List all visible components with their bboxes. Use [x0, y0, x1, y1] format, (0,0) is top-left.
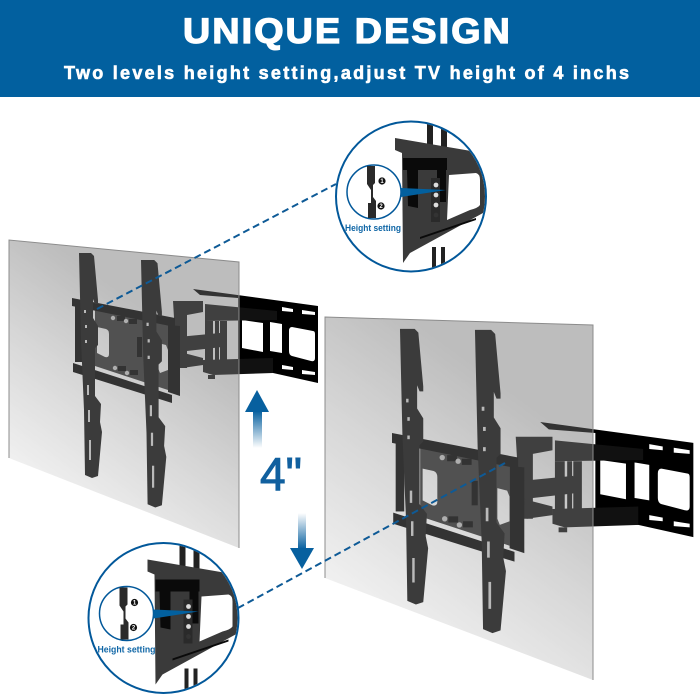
inset circle — [100, 586, 154, 640]
marker 1: 1 — [380, 179, 384, 185]
header banner — [0, 0, 700, 97]
detail: plate close-up — [148, 546, 238, 689]
dashed leader line: bottom callout — [238, 463, 505, 608]
subtitle: Two levels height setting,adjust TV height of 4 inchs — [64, 63, 629, 83]
callout: bottom detail — [88, 542, 252, 698]
detail: plate close-up — [395, 124, 485, 268]
right wall with bracket: lower position — [325, 317, 693, 680]
plate body — [95, 310, 168, 390]
left rail — [400, 329, 428, 605]
wall plate — [540, 422, 693, 537]
dashed leader line: top callout — [97, 184, 336, 309]
wall plate — [193, 289, 318, 383]
left rail — [79, 253, 102, 478]
pointer wedge — [401, 188, 446, 197]
arrow down — [290, 513, 314, 569]
callout: top detail — [336, 121, 500, 277]
swing arm and mounting plate: upper position — [72, 289, 318, 403]
label: height setting: Height setting — [345, 223, 401, 233]
marker 1: 1 — [133, 601, 137, 607]
plate body — [420, 448, 510, 546]
title: UNIQUE DESIGN — [183, 11, 512, 51]
left wall with bracket: upper position — [9, 240, 318, 548]
inset circle — [347, 165, 401, 219]
arms — [516, 437, 643, 532]
arms — [173, 301, 277, 379]
arrow up — [245, 390, 269, 448]
right rail — [475, 330, 506, 633]
marker 2: 2 — [379, 204, 383, 210]
pointer wedge — [154, 610, 198, 618]
height label: 4" — [260, 448, 302, 500]
marker 2: 2 — [132, 626, 136, 632]
swing arm and mounting plate: lower position — [392, 422, 693, 562]
right rail — [141, 260, 166, 508]
label: height setting: Height setting — [98, 644, 156, 654]
